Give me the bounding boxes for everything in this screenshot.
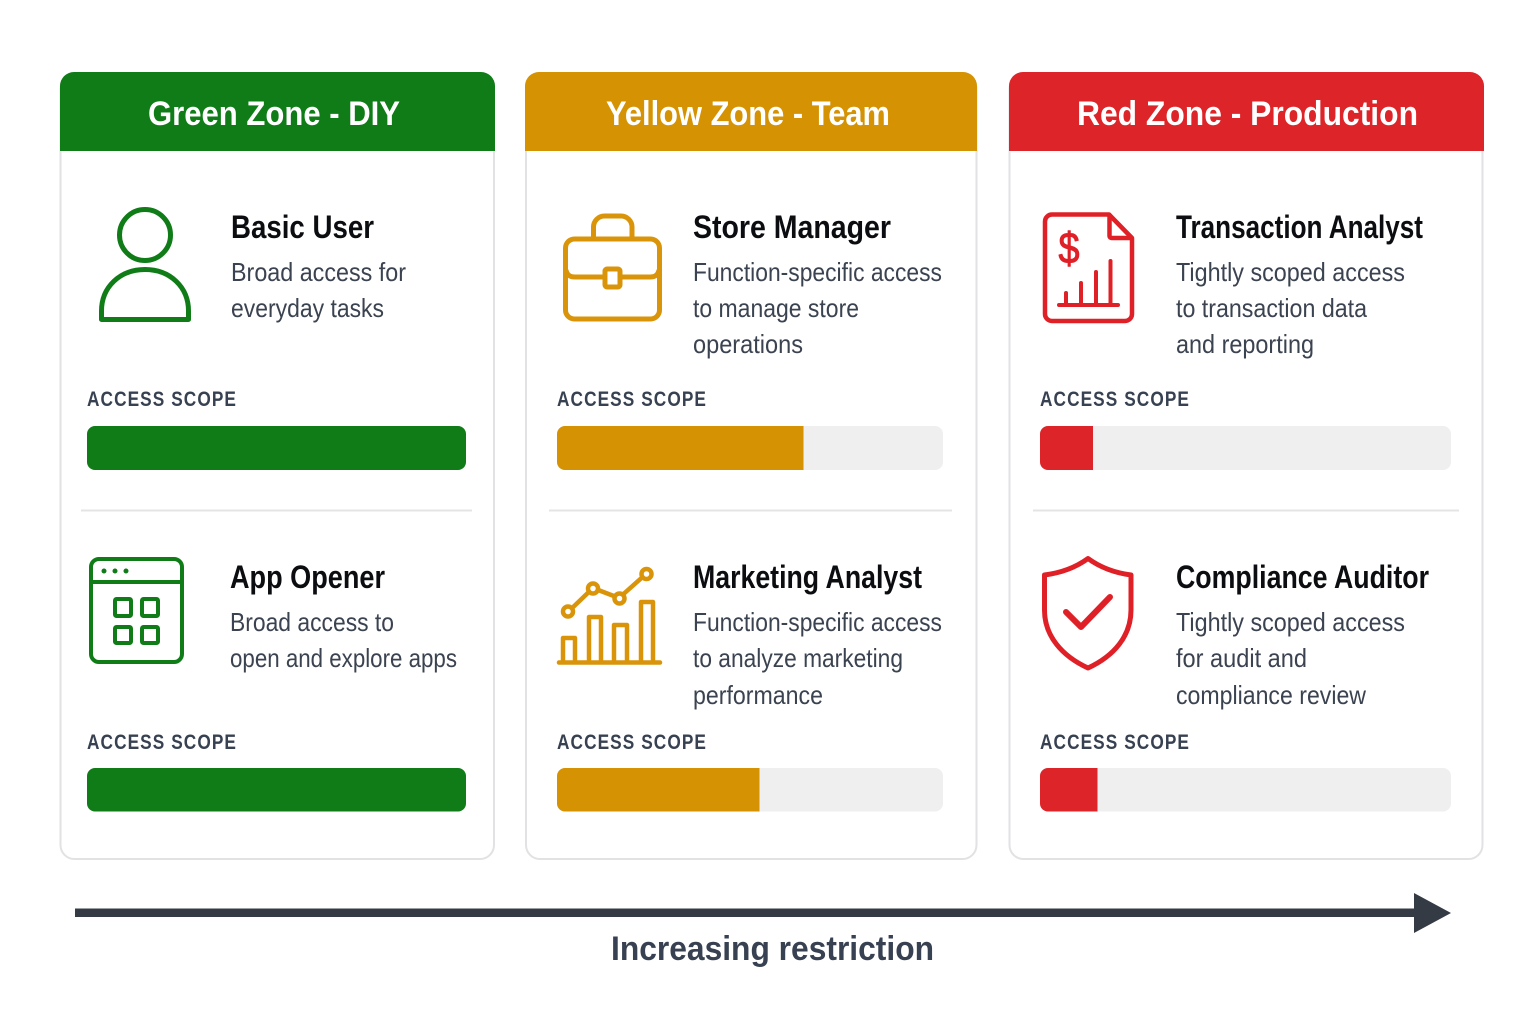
yellow header xyxy=(525,72,977,151)
card outline xyxy=(60,75,494,859)
role title: Marketing Analyst: Marketing Analyst xyxy=(693,559,922,595)
role description: Compliance Auditor: Tightly scoped access xyxy=(1176,607,1405,637)
green header xyxy=(60,72,495,151)
role description: Transaction Analyst xyxy=(1176,257,1405,359)
icon: user xyxy=(102,210,188,320)
role description: Transaction Analyst: and reporting xyxy=(1176,329,1314,359)
role description: App Opener xyxy=(230,607,457,673)
icon: marketing chart xyxy=(559,569,660,662)
access scope label: ACCESS SCOPE xyxy=(87,731,237,754)
role description: App Opener: open and explore apps xyxy=(230,643,457,673)
panel: red zone xyxy=(1009,72,1484,859)
green header: Green Zone - DIY xyxy=(148,95,400,133)
red header: Red Zone - Production xyxy=(1077,95,1418,133)
card outline xyxy=(526,75,976,859)
role description: Marketing Analyst: Function-specific access xyxy=(693,607,942,637)
access bar: low xyxy=(1040,768,1451,812)
arrow caption: Increasing restriction xyxy=(611,930,934,968)
access scope label: ACCESS SCOPE xyxy=(87,388,237,411)
role description: Store Manager: to manage store xyxy=(693,293,859,323)
panel: yellow zone xyxy=(525,72,977,859)
role description: Transaction Analyst: Tightly scoped access xyxy=(1176,257,1405,287)
role description: Compliance Auditor: compliance review xyxy=(1176,680,1366,710)
role description: Basic User xyxy=(231,257,406,323)
icon: financial document xyxy=(1045,214,1132,321)
access bar: medium xyxy=(557,426,943,470)
role description: Compliance Auditor xyxy=(1176,607,1405,710)
icon: financial document: $ xyxy=(1058,224,1080,273)
role description: Basic User: everyday tasks xyxy=(231,293,384,323)
access bar: low xyxy=(1040,426,1451,470)
card outline xyxy=(1010,75,1482,859)
role description: App Opener: Broad access to xyxy=(230,607,394,637)
access scope label: ACCESS SCOPE xyxy=(1040,388,1190,411)
access bar: full xyxy=(87,426,466,470)
icon: briefcase xyxy=(566,216,660,319)
access scope label: ACCESS SCOPE xyxy=(557,731,707,754)
role description: Store Manager: operations xyxy=(693,329,803,359)
access scope label: ACCESS SCOPE xyxy=(557,388,707,411)
role title: Store Manager: Store Manager xyxy=(693,209,891,245)
role title: App Opener: App Opener xyxy=(230,559,385,595)
icon: app window xyxy=(91,559,182,662)
access scope label: ACCESS SCOPE xyxy=(1040,731,1190,754)
role description: Marketing Analyst xyxy=(693,607,942,710)
role description: Compliance Auditor: for audit and xyxy=(1176,643,1307,673)
role title: Compliance Auditor: Compliance Auditor xyxy=(1176,559,1429,595)
arrow: increasing restriction xyxy=(75,893,1451,933)
role description: Store Manager xyxy=(693,257,942,359)
icon: shield check xyxy=(1044,558,1131,668)
role title: Basic User: Basic User xyxy=(231,209,374,245)
red header xyxy=(1009,72,1484,151)
role description: Marketing Analyst: to analyze marketing xyxy=(693,643,903,673)
panel: green zone xyxy=(60,72,495,859)
role description: Marketing Analyst: performance xyxy=(693,680,823,710)
role description: Basic User: Broad access for xyxy=(231,257,406,287)
role title: Transaction Analyst: Transaction Analyst xyxy=(1176,209,1423,245)
role description: Store Manager: Function-specific access xyxy=(693,257,942,287)
access bar: full xyxy=(87,768,466,812)
role description: Transaction Analyst: to transaction data xyxy=(1176,293,1367,323)
access bar: medium-low xyxy=(557,768,943,812)
yellow header: Yellow Zone - Team xyxy=(606,95,890,133)
